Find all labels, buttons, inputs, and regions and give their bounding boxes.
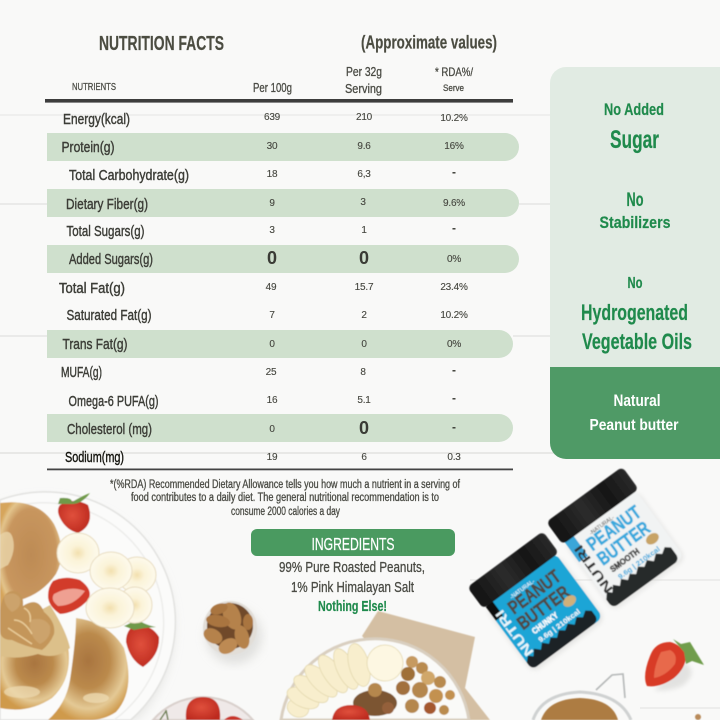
title: nutrition facts: NUTRITION FACTS: [99, 32, 224, 55]
row: cholesterol: Cholesterol (mg): [67, 422, 152, 438]
table header: * RDA%/: [435, 65, 474, 79]
pancake: middle layer: [0, 605, 70, 658]
row: total sugars: 3: [269, 225, 275, 236]
row: total carbohydrate: -: [452, 165, 456, 179]
strawberry: [332, 705, 370, 720]
product: chunky peanut butter jar: 9.6g | 210kcal: [538, 609, 582, 644]
row: total sugars: [66, 221, 456, 240]
subtitle: approximate values: (Approximate values): [361, 32, 497, 52]
row: energy: Energy(kcal): [63, 112, 130, 128]
table header: Per 32g: [346, 64, 382, 79]
row band: cholesterol: [47, 414, 513, 442]
table header: [72, 64, 474, 96]
row: cholesterol: 0: [269, 424, 275, 435]
row: omega-6 pufa: Omega-6 PUFA(g): [68, 394, 158, 410]
row: protein: 30: [267, 141, 278, 152]
row: total carbohydrate: 6,3: [357, 169, 371, 180]
product: chunky peanut butter jar: [467, 531, 607, 674]
product: chunky peanut butter jar: BUTTER: [513, 582, 574, 634]
ingredients heading pill: [251, 529, 455, 556]
row: energy: [63, 112, 468, 128]
pancake: bottom right: [48, 618, 128, 720]
row: total sugars: -: [452, 221, 456, 235]
row: protein: 9.6: [357, 141, 371, 152]
table header: Serving: [345, 81, 382, 96]
strawberry: bottom right: [126, 626, 159, 667]
claim: no added sugar: No Added: [604, 100, 664, 119]
photo: strawberry half: [645, 639, 704, 690]
row: dietary fiber: [66, 197, 465, 213]
ingredients list: [279, 559, 425, 596]
row: protein: Protein(g): [62, 140, 114, 156]
row: sodium: Sodium(mg): [65, 450, 124, 466]
ingredients list: 1% Pink Himalayan Salt: [291, 579, 415, 596]
header rule: [45, 99, 513, 103]
row: omega-6 pufa: [68, 391, 456, 410]
row band: added sugars: [47, 245, 519, 273]
row: mufa: 8: [360, 367, 366, 378]
row: sodium: 6: [361, 452, 367, 463]
row band: protein: [47, 133, 519, 161]
row: total carbohydrate: [69, 165, 456, 184]
row: omega-6 pufa: -: [452, 391, 456, 405]
claim: no stabilizers: [600, 190, 670, 232]
row: added sugars: 0%: [447, 254, 461, 265]
row: trans fat: 0: [269, 339, 275, 350]
row: dietary fiber: 9: [269, 198, 275, 209]
ingredients heading pill: INGREDIENTS: [312, 534, 394, 554]
table header: NUTRIENTS: [72, 81, 116, 93]
row: cholesterol: -: [452, 420, 456, 434]
row: cholesterol: [67, 418, 456, 438]
panel: product claims: [550, 67, 720, 459]
row: mufa: MUFA(g): [61, 365, 102, 381]
row: saturated fat: [66, 308, 468, 324]
row: added sugars: 0: [359, 248, 369, 268]
peanut butter dollop: [0, 591, 54, 650]
row: sodium: 19: [267, 452, 278, 463]
photo: almond bowl: [201, 600, 262, 664]
row: sodium: 0.3: [447, 452, 461, 463]
nutrition table rows: [47, 112, 519, 466]
row: mufa: -: [452, 363, 456, 377]
product: smooth peanut butter jar: NUTRI: [571, 542, 616, 596]
row: energy: 639: [264, 112, 281, 123]
claim text: natural peanut butter: Natural: [614, 391, 660, 410]
row: total fat: 23.4%: [440, 282, 468, 293]
row: saturated fat: 7: [269, 310, 275, 321]
photo: granola bowl with napkin: [281, 611, 490, 720]
row: total carbohydrate: 18: [267, 169, 278, 180]
row: mufa: [61, 363, 456, 381]
row: dietary fiber: Dietary Fiber(g): [66, 197, 148, 213]
row: total sugars: 1: [361, 225, 367, 236]
row: added sugars: Added Sugars(g): [69, 252, 153, 268]
product: chunky peanut butter jar: CHUNKY: [530, 611, 560, 636]
photo: pancake plate: [0, 492, 175, 720]
row: protein: 16%: [444, 141, 464, 152]
product: smooth peanut butter jar: [546, 467, 688, 613]
row: added sugars: [69, 248, 461, 268]
row: cholesterol: 0: [359, 418, 369, 438]
table header: Per 100g: [253, 80, 292, 95]
product: smooth peanut butter jar: -NATURAL-: [589, 515, 616, 537]
product: smooth peanut butter jar: SMOOTH: [609, 547, 642, 574]
footnote: RDA explanation: *(%RDA) Recommended Dietary Allowance tells you how much a nutrient in a serving of: [110, 479, 461, 491]
claim text: natural peanut butter: [590, 391, 678, 434]
row: omega-6 pufa: 5.1: [357, 395, 371, 406]
row: total fat: 15.7: [355, 282, 374, 293]
row: saturated fat: Saturated Fat(g): [66, 308, 152, 324]
claim: natural peanut butter panel: [550, 367, 720, 459]
photo: granola glass jar: [533, 674, 701, 720]
footnote: RDA explanation: consume 2000 calories a day: [231, 506, 340, 518]
napkin: [362, 611, 490, 720]
row: mufa: 25: [266, 367, 277, 378]
table bottom rule: [47, 468, 513, 470]
row: total carbohydrate: Total Carbohydrate(g): [69, 168, 189, 184]
row: total sugars: Total Sugars(g): [66, 224, 144, 240]
photo: small strawberry bowl: [153, 697, 253, 720]
row: energy: 10.2%: [440, 113, 468, 124]
claim: no hydrogenated vegetable oils: No: [628, 275, 643, 292]
strawberry: top: [58, 501, 90, 533]
row: added sugars: 0: [267, 248, 277, 268]
strawberry stem: top: [58, 493, 90, 504]
pancake: top left: [0, 502, 62, 612]
footnote: RDA explanation: food contributes to a daily diet. The general nutritional recommendation is to: [131, 492, 439, 504]
row: total fat: Total Fat(g): [59, 281, 125, 297]
product: chunky peanut butter jar: PEANUT: [504, 566, 565, 618]
row: omega-6 pufa: 16: [267, 395, 278, 406]
claim: no stabilizers: Stabilizers: [600, 213, 670, 232]
row: sodium: [65, 450, 461, 466]
product: smooth peanut butter jar: PEANUT: [583, 502, 645, 555]
claim: no added sugar: [604, 100, 664, 154]
row: saturated fat: 10.2%: [440, 310, 468, 321]
row band: dietary fiber: [47, 189, 519, 217]
table header: Serve: [443, 83, 464, 94]
granola: [353, 656, 455, 716]
claim: no added sugar: Sugar: [610, 126, 659, 154]
footnote: RDA explanation: [110, 479, 461, 518]
row: trans fat: Trans Fat(g): [62, 337, 128, 353]
row: saturated fat: 2: [361, 310, 367, 321]
row: trans fat: [62, 337, 461, 353]
row band: trans fat: [47, 330, 513, 358]
row: trans fat: 0%: [447, 339, 461, 350]
claim text: natural peanut butter: Peanut butter: [590, 417, 678, 434]
claim: no stabilizers: No: [626, 190, 644, 211]
row: dietary fiber: 9.6%: [443, 198, 465, 209]
row: energy: 210: [356, 112, 373, 123]
row: protein: [62, 140, 464, 156]
product: chunky peanut butter jar: NUTRI: [492, 607, 536, 659]
product: smooth peanut butter jar: BUTTER: [594, 518, 654, 569]
row: trans fat: 0: [361, 339, 367, 350]
row: dietary fiber: 3: [360, 197, 366, 208]
ingredients tagline: Nothing Else!: [318, 599, 387, 615]
product: smooth peanut butter jar: 9.6g | 210kcal: [617, 546, 662, 581]
row: total fat: [59, 281, 468, 297]
pancake: bottom left: [0, 630, 69, 710]
strawberry: halved middle: [48, 578, 90, 614]
banana slices: [57, 533, 156, 628]
claim: no hydrogenated vegetable oils: [581, 275, 692, 354]
product: chunky peanut butter jar: -NATURAL-: [509, 579, 536, 601]
row: total fat: 49: [266, 282, 277, 293]
banana fan: [284, 641, 403, 720]
ingredients list: 99% Pure Roasted Peanuts,: [279, 559, 425, 576]
